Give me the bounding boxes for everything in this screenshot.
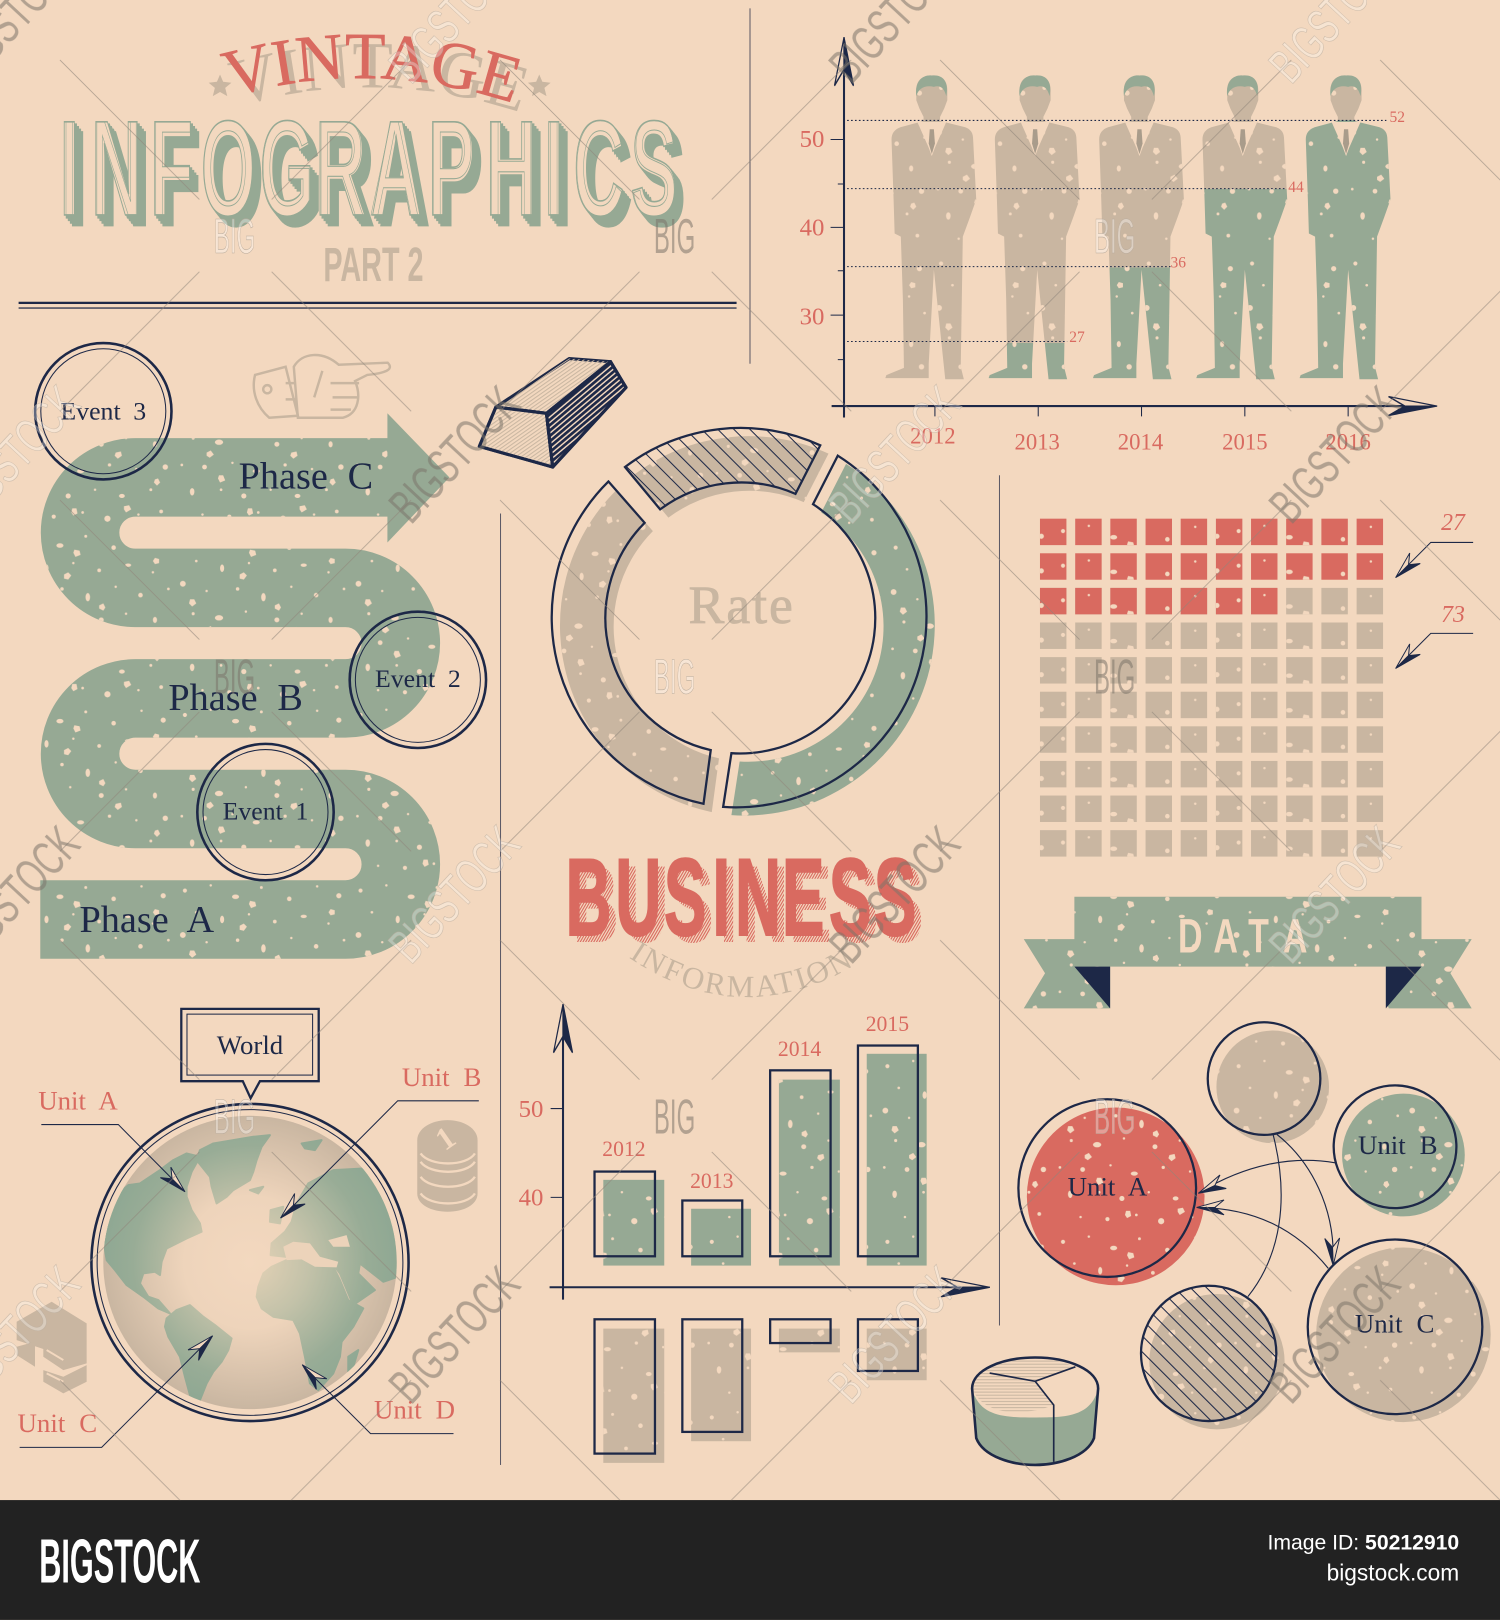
callout 73 (1390, 602, 1473, 674)
icon: pointing hand (254, 355, 390, 418)
infographic canvas: BIG (1094, 1088, 1135, 1144)
bubble: hatched (1141, 1286, 1285, 1429)
red cells row 1 (1040, 519, 1383, 545)
watermarks: light big (214, 208, 1135, 1144)
year labels: 2013 (1014, 429, 1060, 454)
year labels: 2016 (1325, 429, 1371, 454)
star left (209, 74, 231, 96)
tan cells rows 4 to 10 (1040, 622, 1383, 857)
callout: unit b (275, 1062, 481, 1223)
subheading: information: INFORMATION (630, 941, 851, 998)
star right (528, 74, 551, 96)
event 2 marker (350, 612, 486, 748)
positive bar outlines (595, 1046, 918, 1256)
negative bar outlines (595, 1319, 918, 1454)
hatched segment (625, 428, 829, 518)
level values: 52 (1389, 109, 1405, 126)
icon: gold bar (479, 359, 626, 467)
business face: BUSINESS (566, 836, 916, 958)
footer bar: BIGSTOCK (39, 1528, 201, 1597)
connector arrows (1195, 1175, 1341, 1266)
callout: world label: World (217, 1030, 284, 1060)
callout: unit c (18, 1331, 218, 1447)
icon: coin stack: 1 (429, 1119, 462, 1157)
watermarks: light big: BIG (654, 648, 695, 704)
globe rings (91, 1104, 409, 1421)
serpentine band (40, 477, 401, 920)
axis labels: 30 (800, 303, 824, 330)
red cells row 2 (1040, 553, 1383, 580)
callout 27 (1390, 510, 1473, 583)
bar year labels: 2013 (690, 1169, 733, 1193)
ribbon shape (1024, 897, 1472, 1008)
globe ocean (103, 1116, 397, 1409)
callout: unit a (38, 1086, 190, 1197)
event 2 marker: Event 2 (375, 664, 461, 693)
watermarks: grey big: BIG (214, 648, 255, 704)
person 2015 (1196, 75, 1287, 379)
axis labels (800, 126, 824, 330)
level values: 36 (1170, 255, 1186, 272)
bubble: unit c: Unit C (1355, 1309, 1434, 1339)
title: VINTAGE: VINTAGE (220, 34, 520, 102)
arrow head (387, 413, 449, 542)
bubble: top tan (1208, 1022, 1329, 1143)
footer bar (0, 1500, 1500, 1620)
connector curves (1200, 1134, 1335, 1297)
title block (60, 34, 686, 292)
title: INFOGRAPHICS inline: INFOGRAPHICS (60, 92, 677, 244)
title: INFOGRAPHICS extrusion: INFOGRAPHICS (66, 100, 684, 252)
arrow: y axis (835, 37, 854, 86)
event 3 marker (35, 343, 171, 479)
title: VINTAGE shadow: VINTAGE (227, 44, 527, 111)
bar year labels: 2015 (866, 1012, 909, 1036)
level values (1069, 109, 1405, 346)
ribbon speckle (1024, 897, 1472, 1008)
divider rule under title (19, 302, 737, 309)
axis labels: 50 (800, 126, 824, 153)
footer image id: Image ID: 50212910 (1267, 1532, 1459, 1555)
watermarks: light bigstock: BIGSTOCK (378, 816, 530, 973)
callout: unit c: Unit C (18, 1408, 97, 1438)
bubble: unit a (1018, 1099, 1205, 1285)
panel: unit bubbles (1018, 1022, 1491, 1429)
level values: 27 (1069, 329, 1085, 346)
bubble: unit b (1334, 1085, 1465, 1216)
watermarks: grey bigstock: BIGSTOCK (378, 1256, 530, 1413)
event 1 marker: Event 1 (223, 796, 308, 825)
phase labels: Phase B (168, 677, 303, 719)
bar year labels: 2012 (602, 1137, 646, 1161)
bar axis labels: 40 (519, 1185, 543, 1212)
globe continents (104, 1135, 398, 1400)
chart: bar chart (519, 1004, 990, 1463)
bubble: unit a: Unit A (1068, 1171, 1148, 1201)
tan segment (552, 481, 719, 812)
watermarks: light bigstock: BIGSTOCK (818, 376, 970, 533)
icon: stacked books (17, 1302, 87, 1393)
bar year labels (602, 1012, 909, 1193)
arrow: bar x axis (941, 1278, 990, 1297)
watermarks: light bigstock: BIGSTOCK (1258, 816, 1411, 973)
axis labels: 40 (800, 215, 824, 242)
bubble: unit b: Unit B (1358, 1130, 1438, 1160)
callout: unit d: Unit D (374, 1394, 455, 1424)
year labels: 2014 (1118, 429, 1163, 454)
bar chart axes (550, 1008, 983, 1300)
icon: cylinder pie (972, 1358, 1098, 1465)
watermarks: light big: BIG (214, 1088, 255, 1144)
watermarks: grey bigstock: BIGSTOCK (818, 816, 970, 973)
bar year labels: 2014 (778, 1037, 821, 1061)
year labels: 2015 (1222, 429, 1268, 454)
infographic canvas: BIG (1094, 208, 1135, 264)
panel: world globe (18, 1009, 481, 1447)
title: INFOGRAPHICS extrusion: INFOGRAPHICS (62, 95, 680, 246)
callout 73: 73 (1441, 602, 1465, 628)
year labels: 2012 (910, 423, 956, 448)
donut label: Rate (689, 575, 793, 635)
panel: phases serpentine arrow (35, 343, 486, 941)
watermarks: grey big: BIG (654, 1088, 695, 1144)
bubble: unit c (1308, 1240, 1491, 1422)
business hatched shadow: BUSINESS (573, 843, 924, 965)
watermarks: light big: BIG (214, 208, 255, 264)
phase labels: Phase C (239, 456, 373, 498)
phase labels: Phase A (80, 899, 214, 941)
mediterranean (283, 1235, 350, 1267)
person 2012 (885, 75, 976, 379)
negative bar fills (603, 1329, 927, 1463)
phase labels (80, 456, 373, 941)
positive bar speckle (603, 1054, 927, 1266)
chart: people pictogram (800, 37, 1437, 454)
subtitle: part 2: PART 2 (323, 238, 424, 292)
arrow: x axis (1389, 397, 1437, 416)
watermarks: grey big: BIG (654, 208, 695, 264)
title: INFOGRAPHICS extrusion: INFOGRAPHICS (68, 102, 686, 254)
positive bar fills (603, 1054, 927, 1266)
watermarks: grey bigstock: BIGSTOCK (1258, 1256, 1411, 1413)
callout: unit d (297, 1359, 455, 1434)
callout: unit b: Unit B (402, 1062, 481, 1092)
callout: world label (181, 1009, 319, 1098)
bar axis labels: 50 (519, 1096, 543, 1123)
panel: rate donut chart (552, 428, 935, 816)
person 2014 (1093, 75, 1184, 379)
banner: data ribbon (1024, 897, 1472, 1008)
year labels (910, 423, 1371, 454)
watermarks: grey bigstock: BIGSTOCK (378, 376, 530, 533)
bar axis labels (519, 1096, 543, 1212)
watermarks: grey big (214, 208, 1135, 1144)
ribbon fold right (1386, 967, 1421, 1008)
icon: coin stack (417, 1119, 478, 1212)
ribbon label: DATA (1178, 909, 1307, 963)
infographic canvas: BIG (1094, 648, 1135, 704)
axes (831, 43, 1431, 417)
event 3 marker: Event 3 (60, 397, 146, 426)
person 2013 (989, 75, 1080, 379)
mixed cells row 3 (1040, 588, 1383, 614)
arrow: bar y axis (554, 1004, 573, 1053)
watermarks: light bigstock: BIGSTOCK (818, 1256, 970, 1413)
level values: 44 (1288, 179, 1304, 196)
speckle on band (40, 477, 401, 920)
callout: unit a: Unit A (38, 1086, 118, 1116)
footer site: bigstock.com (1327, 1560, 1459, 1586)
watermarks: grey bigstock: BIGSTOCK (1258, 376, 1411, 533)
event 1 marker (197, 744, 334, 880)
negative bar speckle (603, 1329, 927, 1463)
person 2016 (1300, 75, 1390, 379)
chart: grid pictogram (1040, 510, 1473, 857)
vertical dividers (500, 8, 1000, 1465)
green segment (723, 456, 935, 816)
title: INFOGRAPHICS extrusion: INFOGRAPHICS (64, 97, 682, 249)
heading: business (566, 836, 924, 998)
callout 27: 27 (1441, 510, 1466, 536)
ribbon fold left (1074, 967, 1110, 1008)
dotted level lines (847, 120, 1386, 342)
title: INFOGRAPHICS face: INFOGRAPHICS (60, 92, 677, 244)
